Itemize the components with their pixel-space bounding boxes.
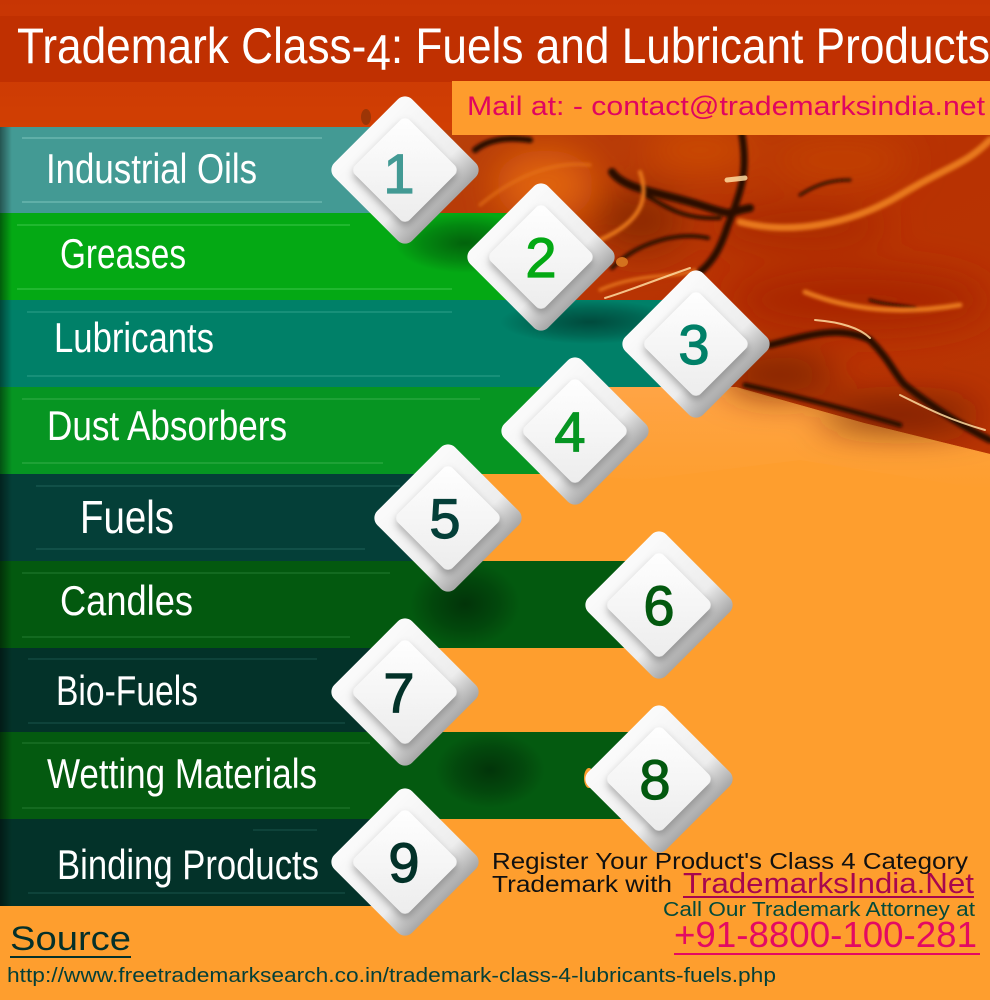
label: Dust Absorbers: Dust Absorbers <box>47 402 287 449</box>
band 5 <box>0 474 445 561</box>
diamond 9 <box>327 784 483 940</box>
label: Candles: Candles <box>60 577 193 624</box>
diamond 8: 8 <box>639 748 671 811</box>
diamond 9: 9 <box>388 831 420 894</box>
title text: 4 <box>366 25 391 81</box>
diamond 3 <box>618 266 774 422</box>
diamond 2: 2 <box>525 226 557 289</box>
call to action text: Trademark with <box>492 871 672 897</box>
diamond 1 <box>327 92 483 248</box>
call to action text: Call Our Trademark Attorney at <box>663 899 975 921</box>
diamond 2 <box>463 179 619 335</box>
source url: http://www.freetrademarksearch.co.in/trademark-class-4-lubricants-fuels.php <box>7 965 776 987</box>
band 8 <box>0 732 640 819</box>
label: Wetting Materials: Wetting Materials <box>47 750 317 797</box>
diamond 8 <box>581 701 737 857</box>
phone number: +91-8800-100-281 <box>674 914 977 955</box>
diamond 4: 4 <box>554 400 586 463</box>
title bar <box>0 16 990 82</box>
diamond 1: 1 <box>383 142 415 205</box>
label: Fuels: Fuels <box>80 491 174 543</box>
band 1 <box>0 127 400 213</box>
diamond 6 <box>581 527 737 683</box>
label: Bio-Fuels: Bio-Fuels <box>56 667 198 714</box>
title text: Trademark Class- <box>17 18 412 74</box>
band 2 <box>0 213 540 300</box>
band 3 <box>0 300 690 387</box>
diamond 3: 3 <box>678 313 710 376</box>
email box <box>452 81 990 135</box>
label: Lubricants: Lubricants <box>54 314 214 361</box>
email text: Mail at: - contact@trademarksindia.net <box>467 91 986 121</box>
diamond 7: 7 <box>383 661 415 724</box>
band 9 <box>0 819 400 906</box>
band 4 <box>0 387 570 474</box>
diamond 7 <box>327 614 483 770</box>
call to action text <box>492 848 980 955</box>
band 6 <box>0 561 655 648</box>
label: Industrial Oils: Industrial Oils <box>46 145 257 192</box>
diamond 4 <box>497 353 653 509</box>
band 7 <box>0 648 400 732</box>
diamond 5 <box>370 440 526 596</box>
diamond 6: 6 <box>643 574 675 637</box>
label: Binding Products: Binding Products <box>57 841 319 888</box>
call to action text: Register Your Product's Class 4 Category <box>492 848 969 874</box>
label: Greases: Greases <box>60 230 186 277</box>
source: Source <box>10 920 131 958</box>
diamond 5: 5 <box>429 487 461 550</box>
source <box>7 920 776 987</box>
link: TrademarksIndia.Net: TrademarksIndia.Net <box>683 868 974 900</box>
